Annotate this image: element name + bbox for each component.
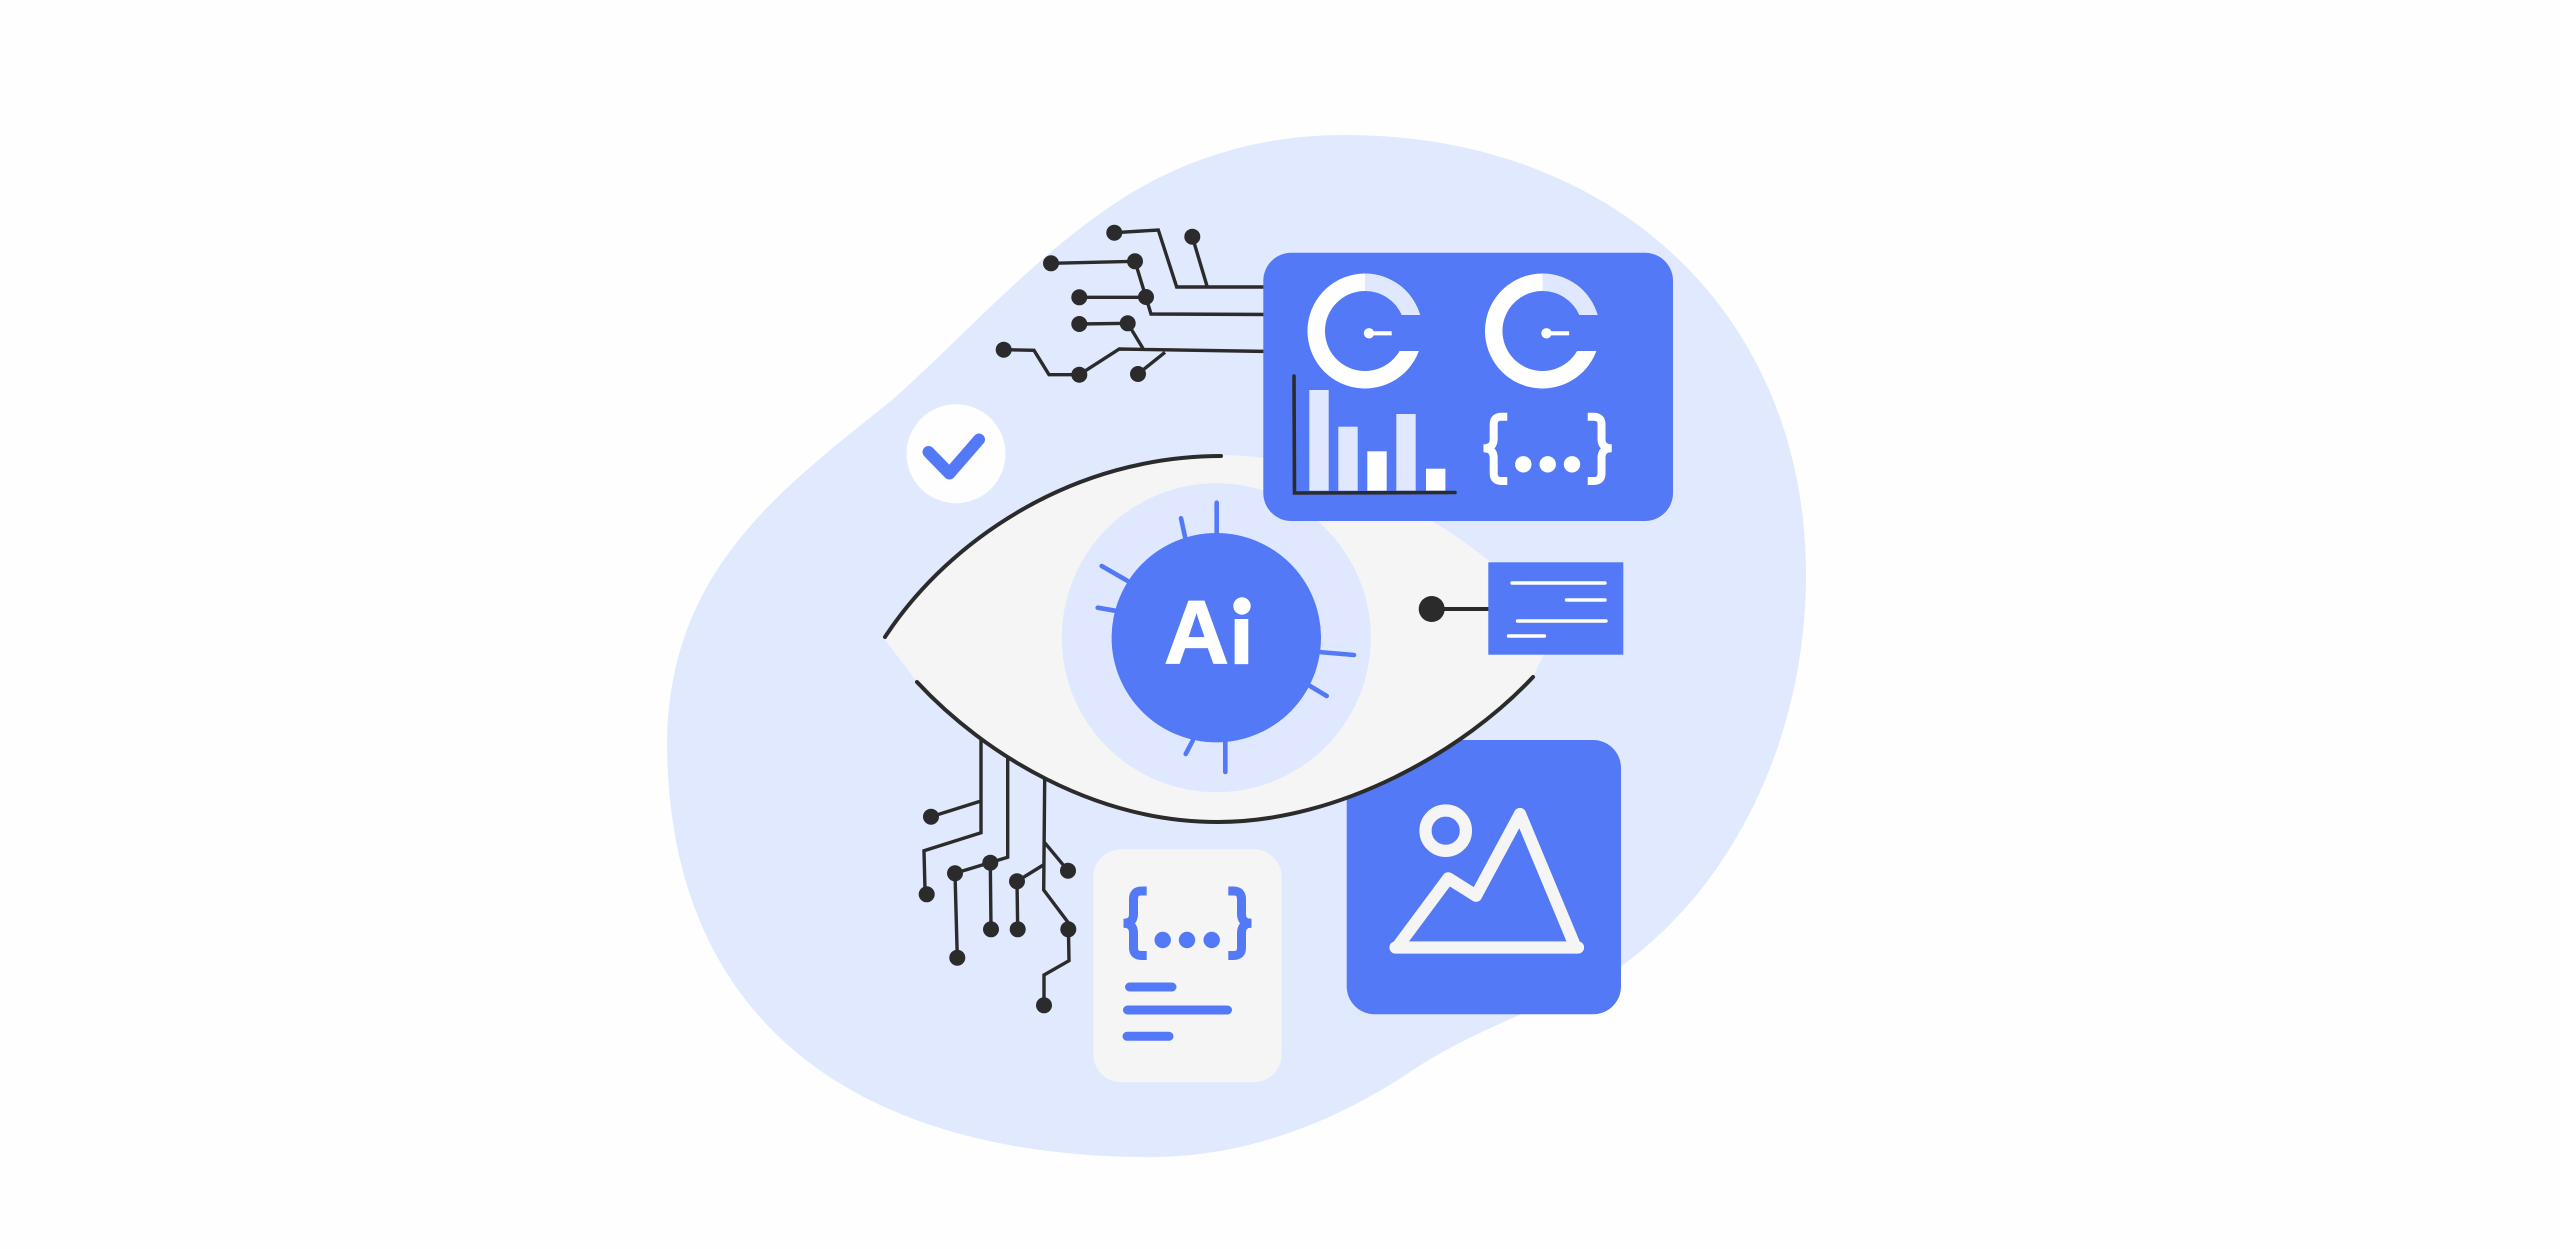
pupil — [1112, 533, 1321, 742]
pupil rays — [1098, 503, 1354, 772]
panel: dashboard — [1263, 253, 1673, 521]
icon: code braces — [1484, 417, 1612, 481]
check badge — [906, 404, 1006, 503]
eye — [883, 455, 1560, 822]
lower eyelid — [917, 677, 1533, 822]
background blob — [667, 135, 1806, 1157]
iris — [1062, 483, 1371, 792]
text lines — [1127, 987, 1228, 1036]
panel: text callout — [1488, 562, 1623, 655]
panel: code card — [1093, 849, 1282, 1082]
Ai label: Ai — [1164, 583, 1254, 683]
icon: picture — [1396, 810, 1578, 948]
upper circuit wires — [996, 225, 1270, 383]
gauge 2 — [1485, 274, 1598, 389]
upper eyelid — [885, 456, 1221, 637]
icon: code braces — [1124, 891, 1252, 956]
lower circuit wires — [919, 740, 1076, 1013]
gauge 1 — [1307, 274, 1420, 389]
bar chart — [1294, 376, 1455, 493]
panel: image card — [1347, 740, 1621, 1014]
callout connector — [1419, 596, 1490, 622]
